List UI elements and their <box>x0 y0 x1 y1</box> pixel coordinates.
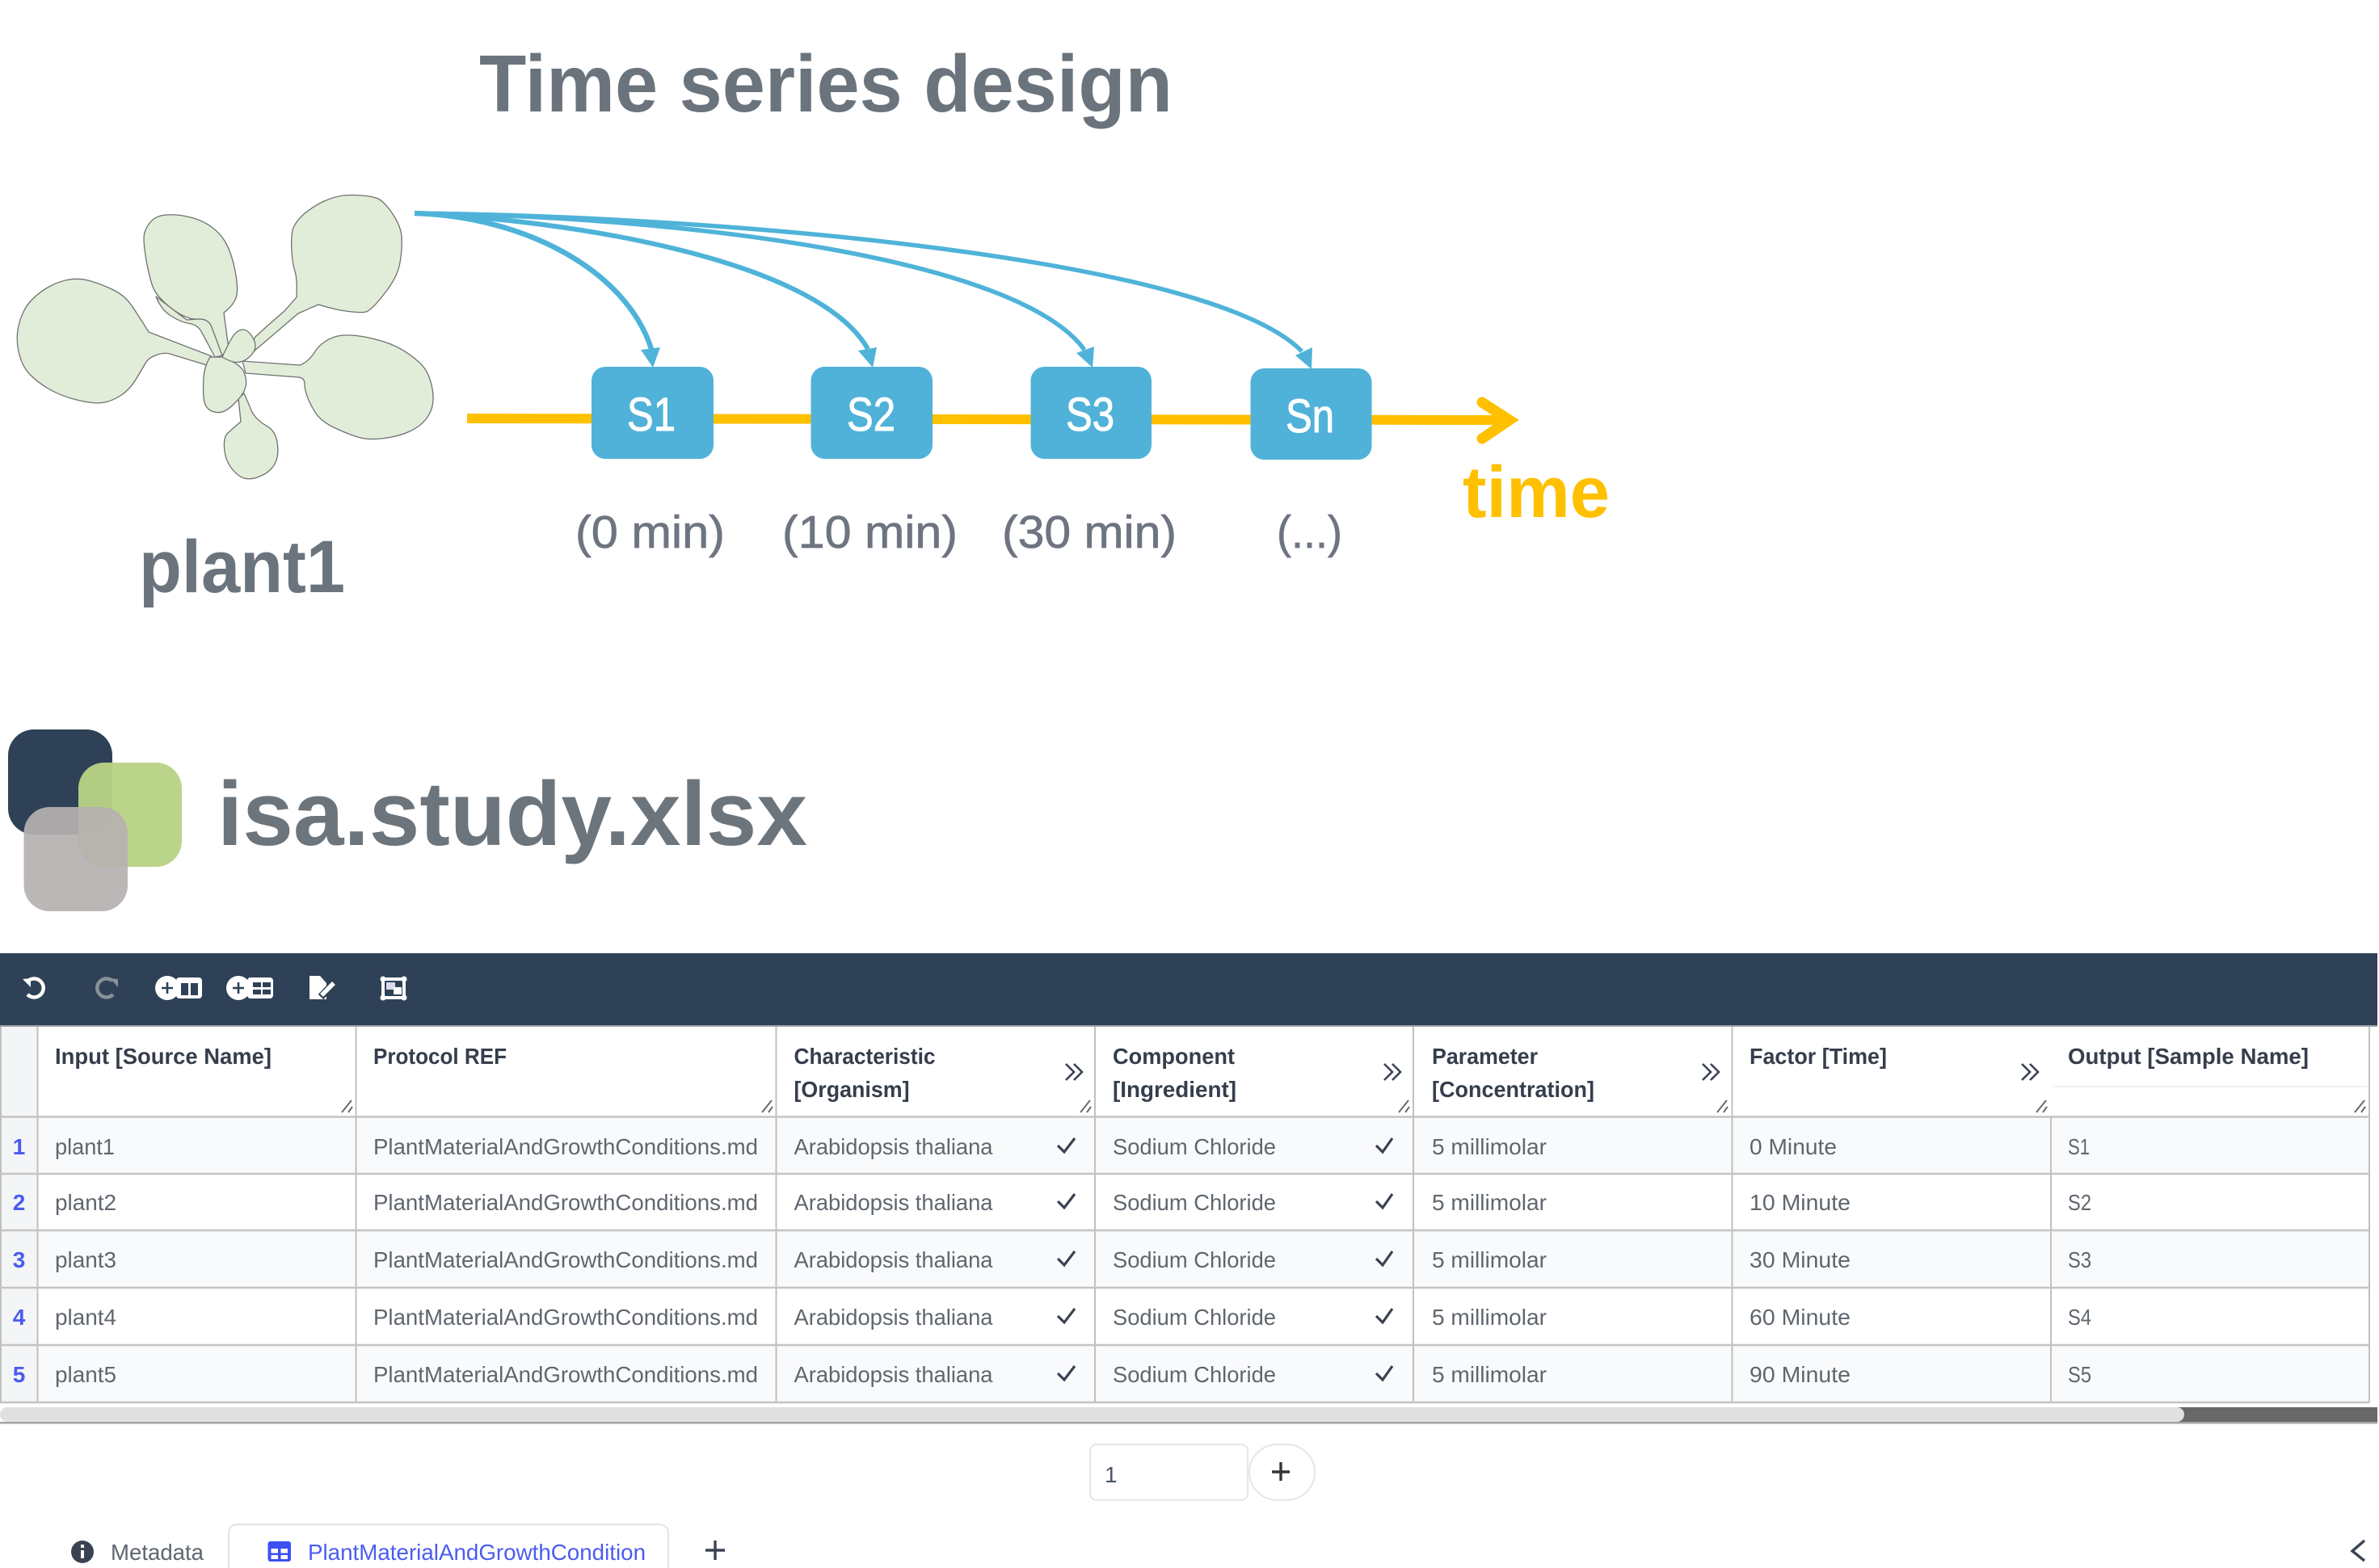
sample box S1: S1 <box>627 389 676 441</box>
arrow: plant to Sn <box>415 213 1312 369</box>
time axis arrow <box>467 402 1510 439</box>
time label ellipsis: (...) <box>1277 507 1342 558</box>
time label: time <box>1463 452 1610 533</box>
row 2: 2 <box>13 1190 25 1215</box>
icon: plant rosette <box>17 195 433 479</box>
time label 30 min: (30 min) <box>1002 507 1177 558</box>
file name heading: isa.study.xlsx <box>217 763 807 864</box>
sample box S3 <box>1031 367 1152 459</box>
icon: table <box>268 1541 291 1562</box>
plant label: plant1 <box>139 526 345 608</box>
column headers: [Ingredient] <box>1113 1077 1236 1102</box>
arrow: plant to S3 <box>415 213 1094 368</box>
row 5: Arabidopsis thaliana <box>794 1362 993 1387</box>
arrow: plant to S1 <box>415 213 660 368</box>
icon: add row <box>226 976 273 1000</box>
horizontal scrollbar <box>0 1407 2377 1423</box>
column headers: [Organism] <box>794 1077 910 1102</box>
row 1: plant1 <box>55 1134 115 1159</box>
leaf: upper left <box>144 215 238 355</box>
row 3: Sodium Chloride <box>1113 1247 1276 1272</box>
leaf: bottom <box>224 393 278 479</box>
row 1: 5 millimolar <box>1432 1134 1547 1159</box>
column headers: [Concentration] <box>1432 1077 1594 1102</box>
row 1 <box>13 1134 2090 1159</box>
column headers: Component <box>1113 1044 1235 1069</box>
icon: undo <box>23 978 44 997</box>
time label 10 min: (10 min) <box>782 507 958 558</box>
row 2: plant2 <box>55 1190 116 1215</box>
collapse chevron <box>2352 1541 2364 1561</box>
row 5 <box>13 1362 2091 1387</box>
column headers: Characteristic <box>794 1044 936 1069</box>
row 4: 4 <box>13 1305 26 1330</box>
row 4: 60 Minute <box>1750 1305 1851 1330</box>
time label 0 min: (0 min) <box>575 507 725 558</box>
add page button <box>1249 1444 1315 1500</box>
row 3: 3 <box>13 1247 25 1272</box>
row 3: PlantMaterialAndGrowthConditions.md <box>373 1247 758 1272</box>
icon: add column <box>155 976 202 1000</box>
icon: edit document <box>309 976 334 999</box>
row 2 <box>13 1190 2091 1215</box>
icon: expand chevrons <box>1066 1064 2038 1080</box>
row 4: plant4 <box>55 1305 116 1330</box>
sample box Sn <box>1251 368 1372 460</box>
row 3: plant3 <box>55 1247 116 1272</box>
row 2: 10 Minute <box>1750 1190 1851 1215</box>
row 3: Arabidopsis thaliana <box>794 1247 993 1272</box>
row 4: Arabidopsis thaliana <box>794 1305 993 1330</box>
row 4: S4 <box>2068 1305 2091 1330</box>
row 5: 5 <box>13 1362 25 1387</box>
tab: active sheet: PlantMaterialAndGrowthCondition <box>308 1540 646 1565</box>
row 2: S2 <box>2068 1190 2091 1215</box>
row 1: Sodium Chloride <box>1113 1134 1276 1159</box>
row 5: plant5 <box>55 1362 116 1387</box>
row 5: PlantMaterialAndGrowthConditions.md <box>373 1362 758 1387</box>
icon: redo <box>97 978 118 997</box>
leaf: centre small <box>222 330 255 363</box>
row 5: Sodium Chloride <box>1113 1362 1276 1387</box>
row 5: 5 millimolar <box>1432 1362 1547 1387</box>
column headers <box>55 1044 2309 1102</box>
column headers: Input [Source Name] <box>55 1044 272 1069</box>
column headers: Protocol REF <box>373 1044 507 1069</box>
row 5: 90 Minute <box>1750 1362 1851 1387</box>
arrow: plant to S2 <box>415 213 877 368</box>
row 4: 5 millimolar <box>1432 1305 1547 1330</box>
tab: metadata <box>71 1540 204 1565</box>
row 3 <box>13 1247 2091 1272</box>
row 1: 0 Minute <box>1750 1134 1837 1159</box>
row 3: S3 <box>2068 1247 2091 1272</box>
leaf: right <box>242 335 433 439</box>
sample box S3: S3 <box>1066 389 1114 441</box>
toolbar <box>0 953 2377 1027</box>
column resize handles <box>342 1100 2365 1112</box>
sample box S2 <box>811 367 933 459</box>
row 1: PlantMaterialAndGrowthConditions.md <box>373 1134 758 1159</box>
sample box S1 <box>592 367 714 459</box>
row 2: Sodium Chloride <box>1113 1190 1276 1215</box>
title: Time series design <box>479 39 1173 129</box>
row 2: 5 millimolar <box>1432 1190 1547 1215</box>
leaf: upper right <box>242 195 402 361</box>
row 4: Sodium Chloride <box>1113 1305 1276 1330</box>
leaf: centre large <box>204 357 246 413</box>
column headers: Output [Sample Name] <box>2068 1044 2309 1069</box>
sample box S2: S2 <box>847 389 895 441</box>
page number input: 1 <box>1105 1462 1118 1487</box>
row 1: Arabidopsis thaliana <box>794 1134 993 1159</box>
page number input <box>1090 1444 1248 1500</box>
tab: active sheet <box>229 1524 668 1568</box>
leaf: hidden upper left <box>156 296 223 357</box>
row 1: S1 <box>2068 1134 2090 1159</box>
column headers: Parameter <box>1432 1044 1538 1069</box>
sample box Sn: Sn <box>1286 390 1334 443</box>
leaf: left <box>17 279 212 403</box>
row 3: 30 Minute <box>1750 1247 1851 1272</box>
icon: select frame <box>380 976 407 1000</box>
row 2: Arabidopsis thaliana <box>794 1190 993 1215</box>
row 2: PlantMaterialAndGrowthConditions.md <box>373 1190 758 1215</box>
tab: metadata: Metadata <box>111 1540 204 1565</box>
table <box>0 1027 2369 1402</box>
add sheet button <box>705 1541 725 1560</box>
column headers: Factor [Time] <box>1750 1044 1887 1069</box>
icon: ISA logo <box>8 729 182 911</box>
row 4: PlantMaterialAndGrowthConditions.md <box>373 1305 758 1330</box>
row 3: 5 millimolar <box>1432 1247 1547 1272</box>
row 4 <box>13 1305 2091 1330</box>
row 5: S5 <box>2068 1362 2091 1387</box>
row 1: 1 <box>13 1134 25 1159</box>
